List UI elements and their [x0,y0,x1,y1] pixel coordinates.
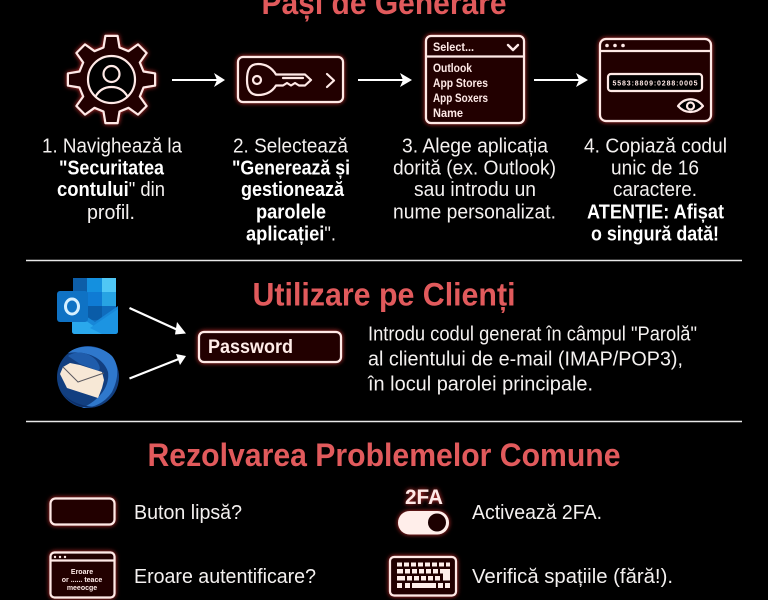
icon: empty button [50,498,114,524]
arrow: step 1 to step 2 [172,73,225,87]
arrow: step 3 to step 4 [534,73,588,87]
step 2 text: gestionează [241,179,345,201]
icon: select dropdown: Name [433,106,463,120]
client usage text [367,322,697,396]
step 4 text: o singură dată! [591,224,719,246]
icon: select dropdown: App Soxers [433,91,488,105]
icon: select dropdown: Select... [433,40,474,54]
arrow: Outlook to password field [130,308,186,334]
label: Verifică spațiile: Verifică spațiile (fără!). [472,565,673,588]
icon: keyboard [390,557,456,596]
label: Activează 2FA: Activează 2FA. [472,501,602,524]
step 4 text: caractere. [613,179,697,201]
step 2 text [232,136,350,246]
step 3 text: sau introdu un [414,179,536,201]
step 1 text: "Securitatea [59,158,165,180]
icon: error window: meeocge [67,585,97,592]
step 2 text: aplicației". [246,224,336,246]
arrow: step 2 to step 3 [358,73,412,87]
step 3 text: 3. Alege aplicația [402,136,549,158]
icon: error window: Eroare [71,569,93,576]
icon: code window with eye [600,39,711,121]
step 4 text: ATENȚIE: Afișat [587,202,724,224]
step 2 text: parolele [256,202,326,224]
heading: Rezolvarea Problemelor Comune: Rezolvarea Problemelor Comune [148,437,620,473]
icon: error window [50,552,114,598]
step 4 text [584,136,727,246]
icon: Thunderbird [57,346,119,408]
icon: code window with eye: 5583:8809:0288:0005 [612,80,698,88]
password field: Password [208,337,293,358]
heading: Utilizare pe Clienți: Utilizare pe Clienți [252,276,516,312]
step 3 text [393,136,556,224]
step 2 text: "Generează și [232,158,350,180]
step 1 text: 1. Navighează la [42,136,183,158]
step 4 text: 4. Copiază codul [584,136,727,158]
client usage text: Introdu codul generat în câmpul "Parolă" [368,322,697,346]
label: Buton lipsă: Buton lipsă? [134,501,242,524]
step 4 text: unic de 16 [611,158,699,180]
step 1 text: contului" din [57,179,165,201]
step 1 text [42,136,183,224]
label: Eroare autentificare: Eroare autentificare? [134,565,316,588]
icon: key button [238,57,343,102]
icon: Outlook [57,278,118,334]
client usage text: al clientului de e-mail (IMAP/POP3), [368,348,683,370]
icon: select dropdown: Outlook [433,61,472,75]
icon: select dropdown [426,36,524,123]
step 2 text: 2. Selectează [233,136,349,158]
icon: error window: or ...... teace [62,577,102,584]
arrow: Thunderbird to password field [130,354,186,378]
client usage text: în locul parolei principale. [367,372,593,396]
password field [199,332,341,362]
step 3 text: dorită (ex. Outlook) [393,158,556,180]
step 3 text: nume personalizat. [393,202,556,224]
step 1 text: profil. [87,202,135,224]
icon: gear with user [68,36,155,123]
icon: 2FA toggle [398,486,449,534]
icon: 2FA toggle: 2FA [405,486,443,509]
icon: select dropdown: App Stores [433,76,488,90]
